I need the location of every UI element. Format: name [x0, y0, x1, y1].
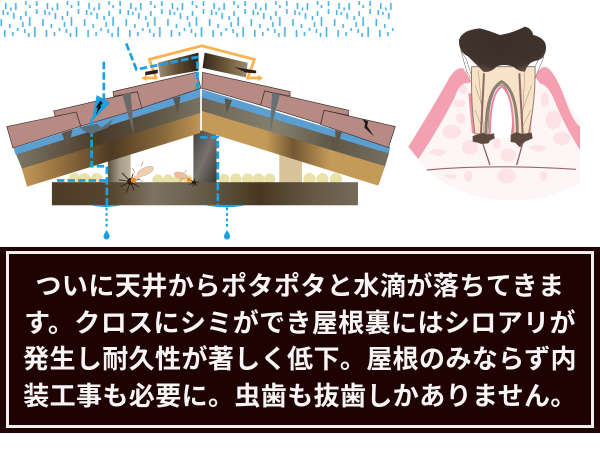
gum — [408, 68, 472, 159]
root canal and pulp — [475, 70, 532, 133]
termite damage — [119, 173, 199, 193]
blood vessel — [427, 167, 576, 170]
tooth diagram — [408, 27, 580, 201]
text line 1: ついに天井からポタポタと水滴が落ちてきま — [35, 271, 565, 301]
right roof layers — [202, 72, 395, 186]
text line 3: 発生し耐久性が著しく低下。屋根のみならず内 — [23, 344, 577, 374]
root decay — [473, 132, 533, 147]
blue leak drips — [89, 205, 248, 240]
white inner frame — [6, 251, 594, 428]
text line 4: 装工事も必要に。虫歯も抜歯しかありません。 — [23, 381, 577, 411]
text panel — [0, 247, 600, 433]
dentin — [471, 67, 535, 134]
nerves — [483, 143, 523, 165]
termites — [131, 162, 191, 183]
crack with impact — [80, 95, 114, 134]
decay crown — [459, 27, 546, 72]
ridge cap flashing — [141, 46, 263, 81]
bone — [408, 68, 580, 201]
text line 2: す。クロスにシミができ屋根裏にはシロアリが — [24, 308, 576, 338]
rain — [0, 0, 394, 38]
left roof layers — [7, 72, 201, 187]
roof diagram — [7, 43, 395, 240]
enamel remnants — [461, 50, 544, 82]
insulation — [69, 173, 342, 185]
ridge boards — [145, 53, 256, 77]
bone spots — [428, 85, 570, 184]
posts — [108, 131, 302, 183]
illustration area — [0, 1, 580, 240]
blue leak paths — [57, 43, 218, 205]
floor beam — [52, 182, 358, 205]
